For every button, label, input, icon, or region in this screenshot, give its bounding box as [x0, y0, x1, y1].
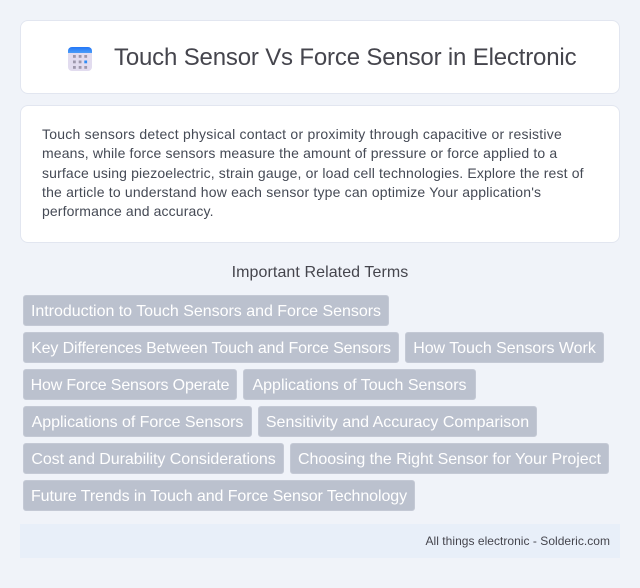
chip: future trends: Future Trends in Touch and Force Sensor Technology	[31, 488, 407, 505]
chip: applications of touch sensors	[243, 369, 476, 400]
chip: introduction	[23, 295, 389, 326]
chip: how force sensors operate: How Force Sensors Operate	[31, 377, 229, 394]
footer	[20, 524, 620, 558]
chip: key differences: Key Differences Between Touch and Force Sensors	[31, 340, 391, 357]
chip: applications of force sensors	[23, 406, 252, 437]
chip: how touch sensors work	[405, 332, 604, 363]
panel: summary text	[20, 105, 620, 243]
text block: summary	[42, 126, 584, 219]
chip: introduction: Introduction to Touch Sensors and Force Sensors	[31, 303, 381, 320]
chip: key differences	[23, 332, 399, 363]
text block: summary: means, while force sensors measure the amount of pressure or force applied to a	[42, 145, 557, 161]
text block: summary: surface using piezoelectric, strain gauge, or load cell technologies. Explore the rest of	[42, 165, 584, 181]
chip: how touch sensors work: How Touch Sensors Work	[413, 340, 596, 357]
chip: applications of touch sensors: Applications of Touch Sensors	[252, 377, 467, 394]
chip: choosing the right sensor: Choosing the Right Sensor for Your Project	[298, 451, 601, 468]
text block: summary: the article to understand how each sensor type can optimize Your application's	[42, 184, 541, 200]
footer text: All things electronic - Solderic.com	[426, 534, 610, 548]
title: Touch Sensor Vs Force Sensor in Electronic	[114, 44, 576, 71]
chip: applications of force sensors: Applications of Force Sensors	[32, 414, 243, 431]
text block: summary: performance and accuracy.	[42, 203, 214, 219]
chip: future trends	[23, 480, 415, 511]
panel: header	[20, 20, 620, 94]
icon: calendar grid	[68, 47, 92, 71]
chip: how force sensors operate	[23, 369, 237, 400]
chip: sensitivity and accuracy: Sensitivity and Accuracy Comparison	[266, 414, 529, 431]
chip: cost and durability	[23, 443, 284, 474]
chip: sensitivity and accuracy	[258, 406, 537, 437]
text block: summary: Touch sensors detect physical contact or proximity through capacitive or resistive	[42, 126, 562, 142]
heading: related terms: Important Related Terms	[232, 264, 408, 281]
chip: cost and durability: Cost and Durability Considerations	[31, 451, 276, 468]
chip: choosing the right sensor	[290, 443, 609, 474]
